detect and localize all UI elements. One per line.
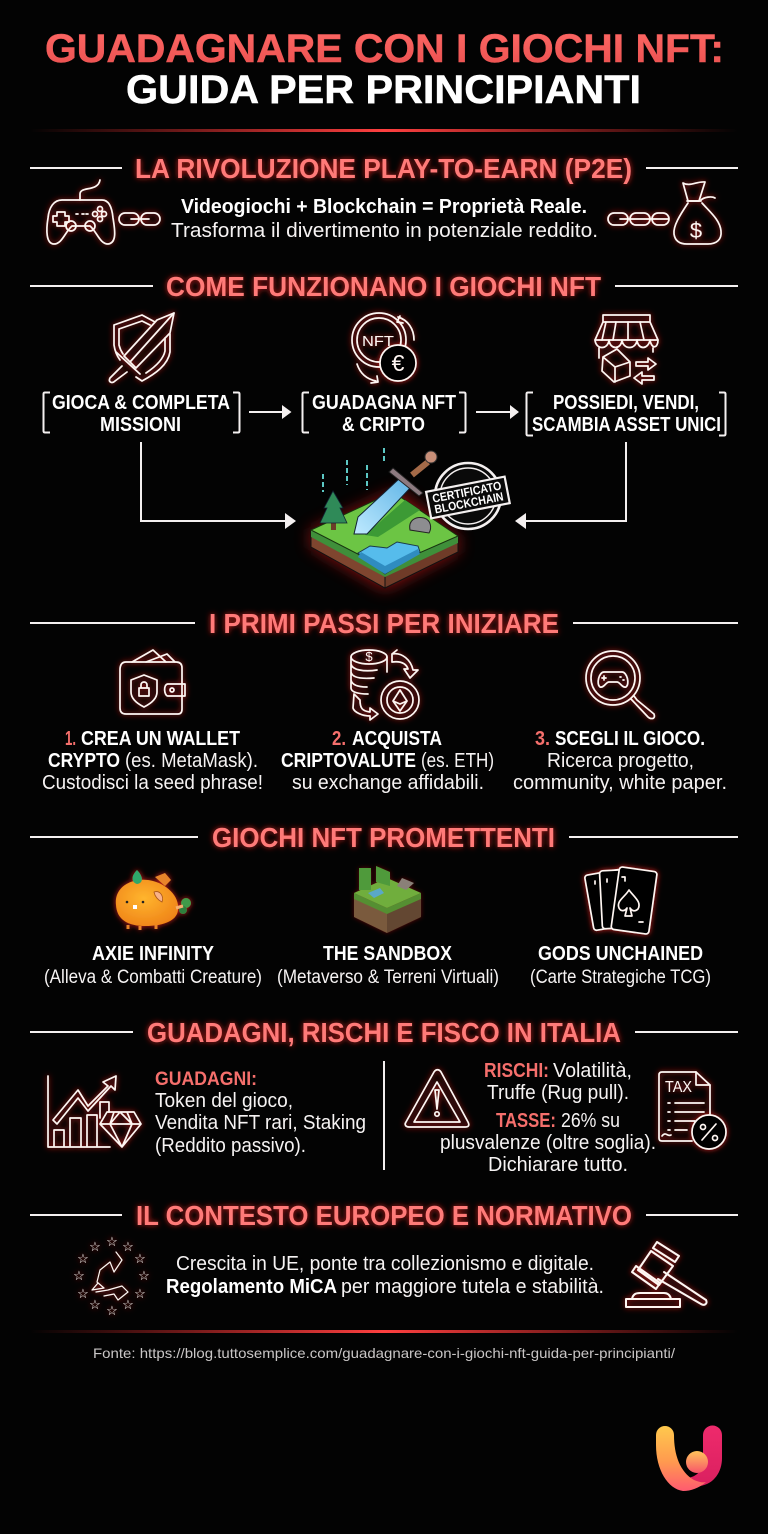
icon: NFT and euro coins: NFT (362, 333, 394, 350)
title: GUADAGNARE CON I GIOCHI NFT: (45, 27, 724, 71)
intro text: Trasforma il divertimento in potenziale reddito. (171, 220, 598, 242)
tree (331, 523, 336, 530)
arrow: step 1 to island (141, 442, 288, 521)
step 1 box: GIOCA & COMPLETA (52, 391, 230, 414)
game: axie infinity (44, 943, 262, 988)
icon: EU stars and map: ☆ (89, 1239, 101, 1254)
step 2 box (302, 391, 466, 436)
game: axie infinity: AXIE INFINITY (92, 943, 215, 965)
heading: contesto europeo: IL CONTESTO EUROPEO E NORMATIVO (136, 1200, 632, 1231)
step 1 box (44, 391, 240, 436)
logo (656, 1426, 722, 1491)
icon: EU stars and map (73, 1234, 150, 1318)
step 3 text: 3. (535, 728, 550, 750)
heading: guadagni rischi fisco: GUADAGNI, RISCHI E FISCO IN ITALIA (147, 1017, 621, 1048)
step 1 text: CRYPTO (48, 750, 120, 772)
panel: guadagni rischi e fisco (30, 1017, 738, 1176)
game: gods unchained: GODS UNCHAINED (538, 943, 703, 965)
risks and taxes text: TASSE: (496, 1110, 556, 1132)
arrow: step 1 to step 2 (249, 405, 292, 419)
heading: giochi promettenti: GIOCHI NFT PROMETTENTI (212, 822, 555, 853)
panel: la rivoluzione play-to-earn (30, 153, 738, 244)
icon: gavel (626, 1242, 707, 1307)
icon: warning triangle (405, 1070, 469, 1127)
sword (354, 478, 411, 534)
game: the sandbox: THE SANDBOX (323, 943, 453, 965)
step 3 text: community, white paper. (513, 772, 727, 794)
panel: giochi nft promettenti (30, 822, 738, 988)
icon: EU stars and map: ☆ (106, 1303, 118, 1318)
earnings text: (Reddito passivo). (155, 1135, 306, 1157)
panel: i primi passi (30, 608, 738, 794)
step 2 text: su exchange affidabili. (292, 772, 484, 794)
icon: coins and ethereum: $ (365, 649, 373, 664)
regulation text: per maggiore tutela e stabilità. (341, 1276, 604, 1298)
step 2 text (281, 728, 494, 794)
heading: come funzionano: COME FUNZIONANO I GIOCHI NFT (166, 271, 601, 302)
icon: EU stars and map: ☆ (77, 1286, 89, 1301)
icon: market stall and exchange (595, 315, 658, 384)
game: gods unchained (530, 943, 711, 988)
risks and taxes text: plusvalenze (oltre soglia). (440, 1132, 656, 1154)
earnings text (155, 1069, 366, 1157)
step 2 box: & CRIPTO (342, 413, 425, 436)
regulation text: Crescita in UE, ponte tra collezionismo e digitale. (176, 1253, 594, 1275)
source line: Fonte: https://blog.tuttosemplice.com/guadagnare-con-i-giochi-nft-guida-per-principianti/ (93, 1345, 675, 1361)
heading: la rivoluzione: LA RIVOLUZIONE PLAY-TO-EARN (P2E) (135, 153, 632, 184)
icon: EU stars and map: ☆ (89, 1297, 101, 1312)
title: GUIDA PER PRINCIPIANTI (126, 68, 641, 112)
intro text: Videogiochi + Blockchain = Proprietà Reale. (181, 196, 587, 218)
step 2 text: CRIPTOVALUTE (281, 750, 416, 772)
step 1 text: CREA UN WALLET (81, 728, 240, 750)
step 3 text: SCEGLI IL GIOCO. (555, 728, 705, 750)
icon: game controller with chain (47, 180, 160, 244)
earnings text: GUADAGNI: (155, 1069, 257, 1090)
icon: playing cards (584, 867, 657, 934)
icon: NFT and euro coins (352, 313, 416, 383)
island top (311, 492, 458, 568)
step 1 text: (es. MetaMask). (125, 750, 258, 772)
risks and taxes text: RISCHI: (484, 1060, 549, 1082)
icon: EU stars and map: ☆ (122, 1239, 134, 1254)
illustration: isometric island with sword and certificate (311, 448, 510, 590)
intro text (171, 196, 598, 242)
game: the sandbox (277, 943, 499, 988)
game: the sandbox: (Metaverso & Terreni Virtuali) (277, 967, 499, 988)
game: axie infinity: (Alleva & Combatti Creature) (44, 967, 262, 988)
step 3 box: SCAMBIA ASSET UNICI (532, 413, 721, 436)
stamp: BLOCKCHAIN (433, 489, 505, 516)
step 2 text: ACQUISTA (352, 728, 442, 750)
regulation text (166, 1253, 604, 1298)
step 1 text: 1. (65, 728, 76, 750)
icon: EU stars and map: ☆ (77, 1251, 89, 1266)
step 1 text: Custodisci la seed phrase! (42, 772, 263, 794)
panel: contesto europeo e normativo (30, 1200, 738, 1318)
step 2 text: 2. (332, 728, 346, 750)
icon: money bag with chain: $ (690, 218, 702, 243)
earnings text: Token del gioco, (155, 1090, 293, 1112)
step 3 text: Ricerca progetto, (547, 750, 694, 772)
digital rain (323, 448, 384, 492)
icon: coins and ethereum (351, 649, 419, 720)
risks and taxes text: Volatilità, (553, 1060, 632, 1082)
step 2 box: GUADAGNA NFT (312, 391, 456, 414)
arrow: step 3 to island (523, 442, 626, 521)
icon: EU stars and map: ☆ (106, 1234, 118, 1249)
risks and taxes text: 26% su (561, 1110, 620, 1132)
icon: NFT and euro coins: € (392, 350, 405, 376)
stamp (426, 463, 510, 529)
icon: EU stars and map: ☆ (73, 1268, 85, 1283)
arrow: step 2 to step 3 (476, 405, 519, 419)
icon: sandbox block (354, 866, 421, 933)
step 2 text: (es. ETH) (421, 750, 494, 772)
icon: shield and sword (109, 313, 174, 382)
stamp: CERTIFICATO (431, 479, 503, 506)
step 1 box: MISSIONI (100, 413, 181, 436)
icon: wallet (120, 650, 185, 714)
step 1 text (42, 728, 263, 794)
step 3 box: POSSIEDI, VENDI, (553, 391, 699, 414)
icon: money bag with chain (608, 182, 721, 244)
icon: EU stars and map: ☆ (134, 1286, 146, 1301)
icon: EU stars and map: ☆ (122, 1297, 134, 1312)
island sides (311, 530, 385, 588)
icon: tax document: TAX (665, 1079, 692, 1096)
game: gods unchained: (Carte Strategiche TCG) (530, 967, 711, 988)
icon: tax document (659, 1072, 726, 1149)
icon: EU stars and map: ☆ (134, 1251, 146, 1266)
panel: come funzionano (30, 271, 738, 590)
step 3 box (526, 391, 726, 436)
regulation text: Regolamento MiCA (166, 1276, 337, 1298)
earnings text: Vendita NFT rari, Staking (155, 1112, 366, 1134)
icon: magnifier with controller (586, 651, 654, 719)
icon: growth chart and diamond (48, 1076, 141, 1147)
icon: EU stars and map: ☆ (138, 1268, 150, 1283)
risks and taxes text (440, 1060, 656, 1176)
risks and taxes text: Dichiarare tutto. (488, 1154, 628, 1176)
title (45, 27, 724, 112)
heading: primi passi: I PRIMI PASSI PER INIZIARE (209, 608, 559, 639)
icon: axie creature (116, 870, 191, 930)
risks and taxes text: Truffe (Rug pull). (487, 1082, 629, 1104)
step 3 text (513, 728, 727, 794)
rock (410, 518, 431, 533)
